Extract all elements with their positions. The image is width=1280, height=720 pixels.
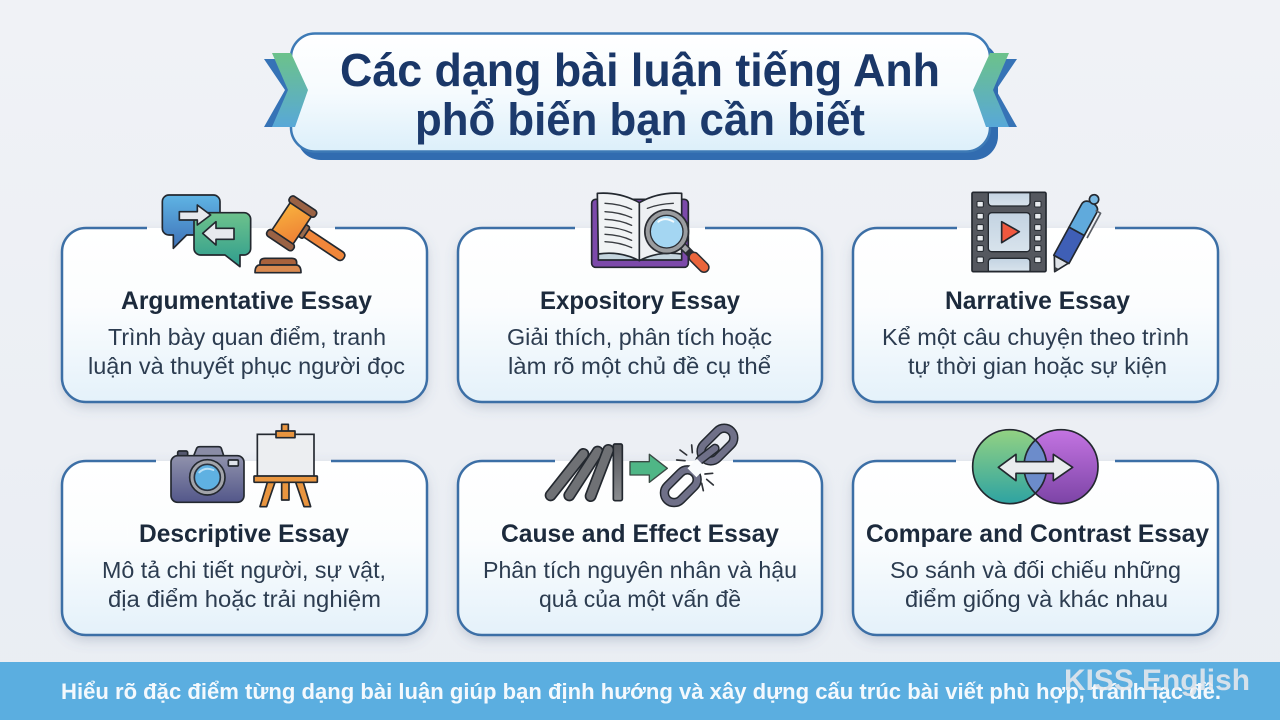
card description bbox=[483, 557, 797, 612]
card description: quả của một vấn đề bbox=[539, 586, 741, 612]
card description bbox=[507, 324, 772, 379]
icon: speech bubbles and gavel bbox=[162, 195, 357, 278]
card description: địa điểm hoặc trải nghiệm bbox=[108, 586, 381, 612]
title text: Các dạng bài luận tiếng Anh bbox=[340, 44, 940, 96]
panel: Narrative Essay bbox=[853, 191, 1218, 402]
card border bbox=[853, 228, 1218, 402]
card heading: Narrative Essay bbox=[945, 287, 1130, 315]
panel: Compare and Contrast Essay bbox=[853, 430, 1218, 635]
card border bbox=[853, 461, 1218, 635]
card description bbox=[102, 557, 386, 612]
card background bbox=[62, 461, 427, 635]
icon: dominoes, arrow and broken chain bbox=[551, 424, 738, 507]
card description: tự thời gian hoặc sự kiện bbox=[908, 353, 1167, 379]
card border bbox=[62, 228, 427, 402]
panel: Descriptive Essay bbox=[62, 424, 427, 635]
card description bbox=[88, 324, 405, 379]
banner plate shadow bbox=[297, 42, 998, 160]
banner ribbon left bbox=[264, 59, 296, 127]
card description: Mô tả chi tiết người, sự vật, bbox=[102, 557, 386, 583]
title banner bbox=[264, 34, 1017, 160]
card description: So sánh và đối chiếu những bbox=[890, 557, 1181, 583]
banner plate bbox=[291, 34, 990, 152]
title text: phổ biến bạn cần biết bbox=[415, 94, 865, 145]
icon: overlapping circles with double arrow bbox=[973, 430, 1098, 504]
card heading: Descriptive Essay bbox=[139, 520, 349, 548]
card border bbox=[62, 461, 427, 635]
icon: camera and easel bbox=[171, 424, 317, 507]
card background bbox=[458, 228, 822, 402]
card background bbox=[458, 461, 822, 635]
card background bbox=[853, 461, 1218, 635]
card heading: Cause and Effect Essay bbox=[501, 520, 779, 548]
card heading: Compare and Contrast Essay bbox=[866, 520, 1209, 548]
card description: điểm giống và khác nhau bbox=[905, 586, 1168, 612]
footer bar bbox=[0, 662, 1280, 720]
card description: luận và thuyết phục người đọc bbox=[88, 353, 405, 379]
footer text: Hiểu rõ đặc điểm từng dạng bài luận giúp bạn định hướng và xây dựng cấu trúc bài viết phù hợp, tránh lạc đề. bbox=[61, 679, 1221, 704]
card description bbox=[882, 324, 1189, 379]
card description: Trình bày quan điểm, tranh bbox=[108, 324, 386, 350]
panel: Argumentative Essay bbox=[62, 195, 427, 402]
card heading: Argumentative Essay bbox=[121, 287, 372, 315]
banner ribbon overlays bbox=[272, 53, 1009, 127]
card background bbox=[853, 228, 1218, 402]
panel: Cause and Effect Essay bbox=[458, 424, 822, 635]
card description bbox=[890, 557, 1181, 612]
icon: open book and magnifier bbox=[592, 193, 704, 267]
icon: film strip and pen bbox=[972, 191, 1107, 278]
card border bbox=[458, 461, 822, 635]
panel: Expository Essay bbox=[458, 193, 822, 402]
card border bbox=[458, 228, 822, 402]
card heading: Expository Essay bbox=[540, 287, 740, 315]
card background bbox=[62, 228, 427, 402]
card description: Phân tích nguyên nhân và hậu bbox=[483, 557, 797, 583]
banner ribbon right bbox=[985, 59, 1017, 127]
title text bbox=[340, 44, 940, 145]
card description: làm rõ một chủ đề cụ thể bbox=[508, 353, 771, 379]
card description: Kể một câu chuyện theo trình bbox=[882, 324, 1189, 350]
watermark: KISS English bbox=[1064, 664, 1250, 697]
card description: Giải thích, phân tích hoặc bbox=[507, 324, 772, 350]
